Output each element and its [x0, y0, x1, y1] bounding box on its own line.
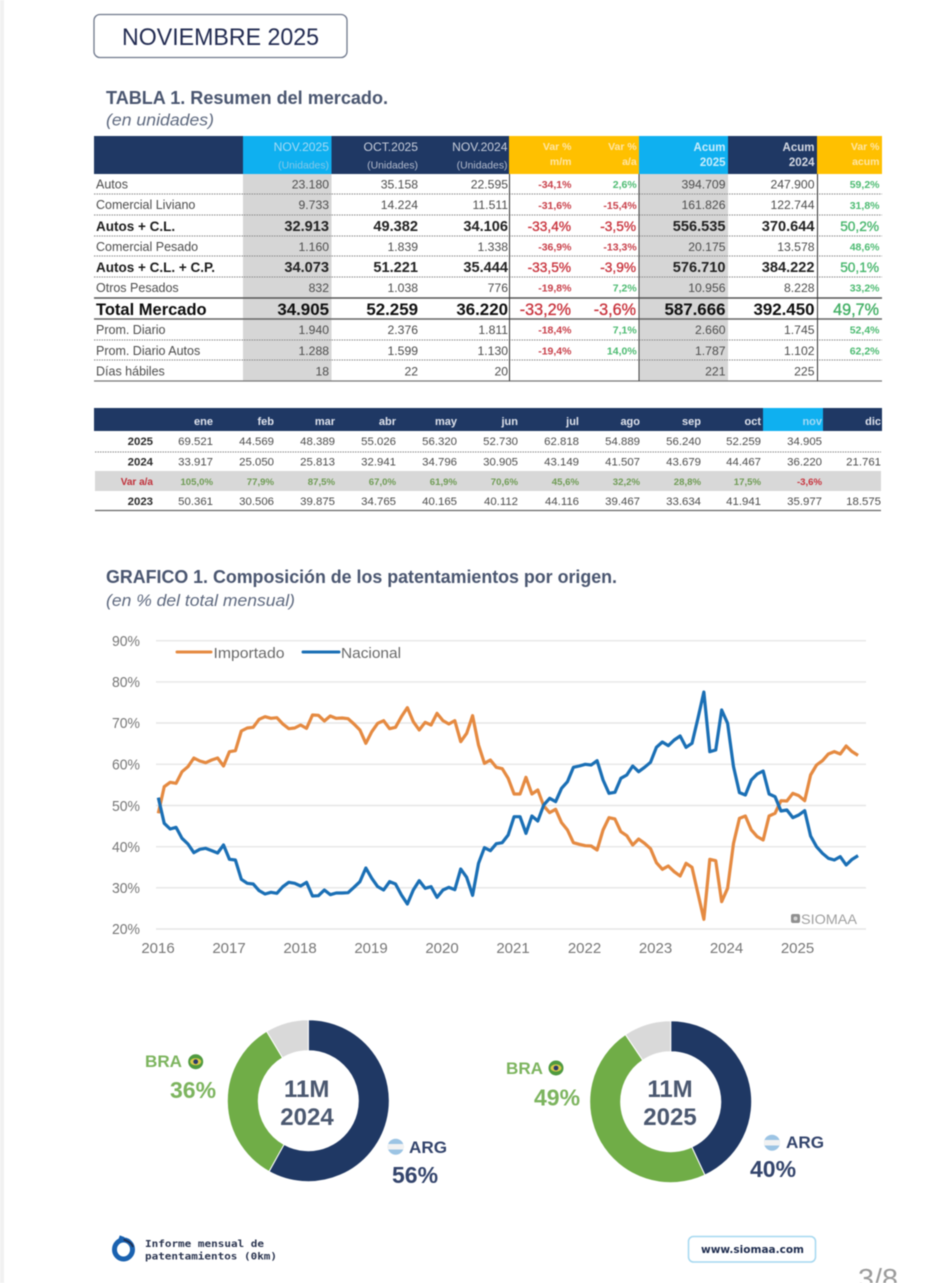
series: nacional — [158, 692, 858, 904]
row: 2023: 40.112 — [484, 496, 518, 508]
row: Total Mercado — [96, 300, 879, 319]
row: Comercial Liviano: 11.511 — [473, 198, 508, 212]
row: 2023: 41.941 — [726, 496, 761, 508]
row: Prom. Diario: Prom. Diario — [96, 323, 166, 337]
row: Total Mercado: -33,2% — [520, 301, 571, 319]
row: 2024: 43.679 — [666, 456, 701, 468]
table 1 header band: Acum — [783, 142, 814, 154]
row: Prom. Diario — [96, 323, 880, 337]
label: ARG 40% — [750, 1133, 824, 1182]
row: 2024: 33.917 — [178, 456, 213, 468]
y axis labels: 40% — [112, 839, 140, 856]
row: 2025: 52.730 — [483, 436, 518, 448]
row: Prom. Diario Autos: 1.787 — [695, 344, 726, 358]
row: 2024: 32.941 — [361, 456, 396, 468]
x axis labels: 2022 — [568, 940, 601, 957]
row: Prom. Diario Autos: 1.288 — [298, 344, 329, 358]
row: 2025: 34.905 — [787, 436, 822, 448]
table 1 header band — [94, 136, 882, 174]
row: 2023 — [128, 496, 881, 508]
title: month box — [94, 14, 347, 58]
x axis labels: 2019 — [354, 940, 388, 957]
row: Otros Pesados: -19,8% — [538, 282, 572, 294]
row: Autos + C.L.: -33,4% — [528, 219, 571, 234]
table 1 header band: a/a — [622, 156, 637, 168]
donut center label 2024 — [280, 1076, 334, 1131]
row: 2024 — [128, 456, 881, 468]
y axis labels: 50% — [112, 798, 140, 815]
row: Dias habiles: 225 — [794, 364, 815, 378]
label: ARG 56%: ARG — [409, 1138, 447, 1157]
table 2 header band: feb — [258, 416, 274, 428]
row: Otros Pesados: 832 — [309, 281, 329, 295]
y axis labels: 90% — [112, 633, 140, 650]
row: Prom. Diario: 1.811 — [478, 323, 508, 337]
footer report label: Informe mensual de — [145, 1239, 264, 1250]
donut center label 2024: 2024 — [280, 1104, 334, 1131]
row: 2025: 2025 — [128, 436, 154, 448]
label: ARG 56%: 56% — [392, 1162, 438, 1188]
label: BRA 49% — [506, 1059, 580, 1110]
heading: grafico 1: (en % del total mensual) — [106, 591, 295, 610]
row: 2023: 39.467 — [605, 496, 640, 508]
row: Otros Pesados: 1.038 — [388, 281, 418, 295]
row: Dias habiles — [96, 364, 815, 378]
table 1 header band: NOV.2025 — [274, 140, 329, 154]
y axis labels: 20% — [112, 921, 140, 938]
row: Autos: Autos — [96, 178, 128, 192]
footer report label — [145, 1239, 277, 1262]
row: Comercial Liviano: -15,4% — [603, 200, 637, 212]
table 2 header band: oct — [744, 416, 761, 428]
row: 2024: 43.149 — [544, 456, 579, 468]
row: Autos — [96, 178, 880, 192]
row: Prom. Diario Autos: 14,0% — [607, 346, 637, 358]
row: Autos + C.L.: 34.106 — [463, 219, 508, 235]
row: Comercial Liviano: 31,8% — [850, 200, 880, 212]
row: Total Mercado: 52.259 — [366, 300, 418, 319]
row: Comercial Pesado: 20.175 — [688, 240, 726, 254]
table 2 header band: sep — [682, 416, 701, 428]
y axis labels: 30% — [112, 880, 140, 897]
table 2 header band: abr — [379, 416, 397, 428]
donut center label 2025 — [643, 1076, 697, 1131]
row: Comercial Pesado: 48,6% — [850, 242, 880, 254]
row: Comercial Pesado: Comercial Pesado — [96, 240, 198, 254]
row: Var a/a: 32,2% — [613, 477, 640, 488]
table 2 header band: may — [435, 416, 458, 428]
row: Prom. Diario: -18,4% — [538, 324, 572, 336]
table 2 header band: dic — [865, 416, 881, 428]
row: 2024: 34.796 — [422, 456, 457, 468]
row: 2023: 34.765 — [361, 496, 396, 508]
row: Var a/a: 77,9% — [247, 477, 274, 488]
heading: tabla 1: (en unidades) — [106, 110, 214, 130]
x axis labels: 2020 — [425, 940, 459, 957]
row: Autos + C.L. + C.P.: -33,5% — [528, 260, 571, 275]
row: Comercial Liviano: 9.733 — [298, 198, 329, 212]
row: 2025: 56.320 — [422, 436, 457, 448]
row: Total Mercado: 34.905 — [277, 300, 329, 319]
x axis labels: 2021 — [496, 940, 530, 957]
table 1 header band: Var % — [851, 141, 880, 153]
row: 2023: 39.875 — [300, 496, 335, 508]
row: Comercial Pesado: 1.160 — [298, 240, 329, 254]
table 1 header band: 2024 — [789, 157, 815, 169]
row: 2025: 62.818 — [544, 436, 579, 448]
donut center label 2025: 2025 — [643, 1104, 697, 1131]
x axis labels: 2016 — [141, 940, 175, 957]
row: Autos: 394.709 — [681, 178, 726, 192]
row: Dias habiles: 22 — [404, 364, 418, 378]
x axis labels: 2017 — [212, 940, 246, 957]
table 1 header band: acum — [852, 156, 880, 168]
row: Total Mercado: 587.666 — [664, 300, 726, 319]
row: Var a/a: -3,6% — [797, 477, 822, 488]
table 1 header band: (Unidades) — [457, 160, 508, 172]
row: Autos + C.L.: 556.535 — [673, 219, 726, 235]
label: ARG 40%: ARG — [786, 1133, 824, 1152]
row: Comercial Liviano: 14.224 — [381, 198, 418, 212]
row: Autos + C.L. + C.P.: Autos + C.L. + C.P. — [96, 260, 215, 275]
row: Autos + C.L.: 370.644 — [762, 219, 815, 235]
table 1 header band: 2025 — [700, 157, 726, 169]
table 1 header band: Acum — [694, 142, 726, 154]
x axis labels: 2024 — [710, 940, 743, 957]
row: Total Mercado: 36.220 — [456, 300, 508, 319]
row: Autos + C.L. + C.P.: 35.444 — [463, 260, 509, 276]
row: 2024: 30.905 — [483, 456, 518, 468]
row: Total Mercado: 49,7% — [833, 301, 879, 319]
row: Total Mercado: 392.450 — [753, 300, 814, 319]
row: Comercial Liviano: Comercial Liviano — [96, 198, 195, 212]
label: ARG 40%: 40% — [750, 1156, 796, 1182]
row: Prom. Diario: 1.745 — [784, 323, 815, 337]
row: Autos: 22.595 — [471, 178, 508, 192]
footer website button: www.siomaa.com — [701, 1243, 804, 1256]
table 2 header band: mar — [315, 416, 336, 428]
row: Comercial Liviano: 161.826 — [681, 198, 726, 212]
row: Autos: 35.158 — [381, 178, 418, 192]
row: 2025: 48.389 — [300, 436, 335, 448]
row: Prom. Diario Autos: -19,4% — [538, 346, 572, 358]
footer report label: patentamientos (0km) — [145, 1250, 277, 1262]
label: BRA 36% — [145, 1052, 216, 1103]
row: Comercial Pesado: -36,9% — [538, 242, 572, 254]
row: 2024: 2024 — [128, 456, 154, 468]
row: Dias habiles: Días hábiles — [96, 364, 165, 378]
row: Prom. Diario Autos: 1.130 — [478, 344, 508, 358]
title: month box: NOVIEMBRE 2025 — [122, 24, 319, 51]
y axis labels: 70% — [112, 715, 140, 732]
row: 2025: 44.569 — [239, 436, 274, 448]
chart legend: Nacional — [341, 645, 401, 662]
watermark: SIOMAA: SIOMAA — [801, 911, 858, 927]
footer website button — [688, 1236, 816, 1262]
donut chart: 11M 2024 — [145, 1020, 447, 1188]
row: Autos + C.L. + C.P.: 51.221 — [373, 260, 418, 276]
row: Prom. Diario Autos: 62,2% — [850, 346, 880, 358]
row: 2023: 35.977 — [787, 496, 822, 508]
x axis labels: 2023 — [639, 940, 672, 957]
x axis labels: 2018 — [283, 940, 317, 957]
row: Autos + C.L.: 50,2% — [840, 219, 879, 234]
row: Autos + C.L. + C.P. — [96, 260, 879, 276]
donut center label 2024: 11M — [284, 1076, 329, 1103]
row: Autos: 247.900 — [770, 178, 815, 192]
heading: grafico 1: GRAFICO 1. Composición de los patentamientos por origen. — [106, 567, 617, 587]
chart legend: Importado — [214, 645, 284, 662]
label: BRA 36%: 36% — [170, 1077, 216, 1103]
row: Var a/a: 70,6% — [491, 477, 518, 488]
row: 2024: 25.813 — [300, 456, 335, 468]
row: Var a/a: 45,6% — [552, 477, 579, 488]
donut chart: 11M 2025 — [506, 1021, 824, 1183]
line chart: importado vs nacional — [112, 633, 866, 957]
table 2: monthly registrations — [94, 408, 882, 510]
row: Autos + C.L. + C.P.: 576.710 — [673, 260, 726, 276]
donut rings 2024 — [227, 1020, 389, 1182]
row: Var a/a — [121, 477, 822, 488]
row: Prom. Diario Autos: 1.599 — [388, 344, 418, 358]
table 1 header band: (Unidades) — [278, 160, 329, 172]
row: Autos + C.L. + C.P.: 50,1% — [840, 260, 879, 275]
label: ARG 56% — [387, 1138, 447, 1188]
row: Comercial Pesado: 1.338 — [478, 240, 508, 254]
y axis labels: 60% — [112, 756, 140, 774]
table 2 header band: jul — [565, 416, 579, 428]
row: 2023: 18.575 — [846, 496, 881, 508]
x axis labels: 2025 — [781, 940, 814, 957]
table 2 header band: ene — [194, 416, 213, 428]
label: BRA 49%: 49% — [534, 1084, 580, 1110]
row: Autos: 2,6% — [613, 179, 637, 191]
row: Comercial Pesado: 13.578 — [777, 240, 815, 254]
row: 2025: 55.026 — [361, 436, 396, 448]
row: 2024: 25.050 — [239, 456, 274, 468]
row: Autos + C.L. + C.P.: 384.222 — [762, 260, 814, 276]
label: BRA 49%: BRA — [506, 1059, 543, 1078]
table 2 header band: ago — [620, 416, 640, 428]
footer logo — [114, 1235, 133, 1259]
row: Autos + C.L. — [96, 219, 879, 235]
table 1: market summary — [94, 136, 882, 381]
row: Otros Pesados: Otros Pesados — [96, 281, 179, 295]
label: BRA 36%: BRA — [145, 1052, 182, 1071]
row: Comercial Liviano: 122.744 — [770, 198, 815, 212]
row: Autos + C.L.: 32.913 — [284, 219, 329, 235]
row: Comercial Liviano — [96, 198, 880, 212]
row: Var a/a: 105,0% — [180, 477, 213, 488]
row: Var a/a: 67,0% — [369, 477, 396, 488]
row: Prom. Diario: 2.660 — [695, 323, 726, 337]
row: 2023: 30.506 — [239, 496, 274, 508]
row: Total Mercado: Total Mercado — [96, 301, 207, 319]
row: Var a/a: 17,5% — [734, 477, 761, 488]
row: Autos + C.L.: Autos + C.L. — [96, 219, 175, 234]
row: 2025 — [128, 436, 822, 448]
row: Prom. Diario: 7,1% — [613, 324, 637, 336]
row: 2024: 21.761 — [846, 456, 881, 468]
row: Prom. Diario: 1.940 — [298, 323, 329, 337]
row: 2024: 36.220 — [787, 456, 822, 468]
y axis labels — [112, 633, 140, 938]
row: Autos + C.L.: -3,5% — [600, 219, 636, 234]
row: 2025: 69.521 — [178, 436, 213, 448]
row: Autos + C.L. + C.P.: 34.073 — [284, 260, 329, 276]
row: Autos: 59,2% — [850, 179, 880, 191]
heading: tabla 1 — [106, 88, 388, 130]
row: Autos + C.L. + C.P.: -3,9% — [600, 260, 636, 275]
row: 2023: 33.634 — [666, 496, 701, 508]
row: Comercial Pesado — [96, 240, 880, 254]
row: Otros Pesados: 8.228 — [784, 281, 815, 295]
row: Otros Pesados: 776 — [488, 281, 508, 295]
row: Otros Pesados: 10.956 — [688, 281, 726, 295]
table 2 header band — [94, 408, 882, 431]
table 1 header band: OCT.2025 — [364, 140, 418, 154]
donut rings 2025 — [590, 1021, 752, 1183]
row: Dias habiles: 20 — [494, 364, 508, 378]
row: Dias habiles: 18 — [315, 364, 329, 378]
row: 2024: 44.467 — [726, 456, 761, 468]
row: Autos: 23.180 — [292, 178, 329, 192]
table 1 header band: Var % — [608, 141, 637, 153]
row: Prom. Diario: 2.376 — [388, 323, 418, 337]
row: Comercial Pesado: -13,3% — [603, 242, 637, 254]
row: Autos: -34,1% — [538, 179, 572, 191]
row: Otros Pesados: 33,2% — [850, 282, 880, 294]
row: Dias habiles: 221 — [705, 364, 726, 378]
row: Autos + C.L.: 49.382 — [373, 219, 418, 235]
row: 2023: 50.361 — [178, 496, 213, 508]
row: 2025: 52.259 — [726, 436, 761, 448]
y axis labels: 80% — [112, 674, 140, 691]
donut center label 2025: 11M — [647, 1076, 693, 1103]
x axis labels — [141, 940, 814, 957]
row: Total Mercado: -3,6% — [594, 301, 636, 319]
row: 2025: 54.889 — [605, 436, 640, 448]
chart legend — [177, 645, 401, 662]
row: Prom. Diario Autos: Prom. Diario Autos — [96, 344, 200, 358]
row: Prom. Diario Autos — [96, 344, 880, 358]
row: 2023: 40.165 — [422, 496, 457, 508]
row: 2023: 2023 — [128, 496, 153, 508]
row: 2025: 56.240 — [666, 436, 701, 448]
series: importado — [158, 708, 858, 919]
table 1 header band: Var % — [543, 141, 572, 153]
row: Var a/a: Var a/a — [121, 477, 153, 488]
row: 2023: 44.116 — [545, 496, 579, 508]
row: Var a/a: 87,5% — [308, 477, 335, 488]
row: Otros Pesados — [96, 281, 880, 295]
row: Prom. Diario Autos: 1.102 — [784, 344, 815, 358]
table 2 header band: nov — [802, 416, 823, 428]
row: 2024: 41.507 — [605, 456, 640, 468]
table 1 header band: NOV.2024 — [452, 140, 508, 154]
heading: tabla 1: TABLA 1. Resumen del mercado. — [106, 88, 388, 108]
table 2 header band: jun — [500, 416, 518, 428]
table 1 header band: (Unidades) — [367, 160, 418, 172]
row: Var a/a: 61,9% — [430, 477, 457, 488]
heading: grafico 1 — [106, 567, 617, 610]
row: Comercial Pesado: 1.839 — [388, 240, 418, 254]
row: Var a/a: 28,8% — [674, 477, 701, 488]
row: Prom. Diario: 52,4% — [850, 324, 880, 336]
table 1 header band: m/m — [550, 156, 572, 168]
row: Comercial Liviano: -31,6% — [538, 200, 572, 212]
row: Otros Pesados: 7,2% — [613, 282, 637, 294]
